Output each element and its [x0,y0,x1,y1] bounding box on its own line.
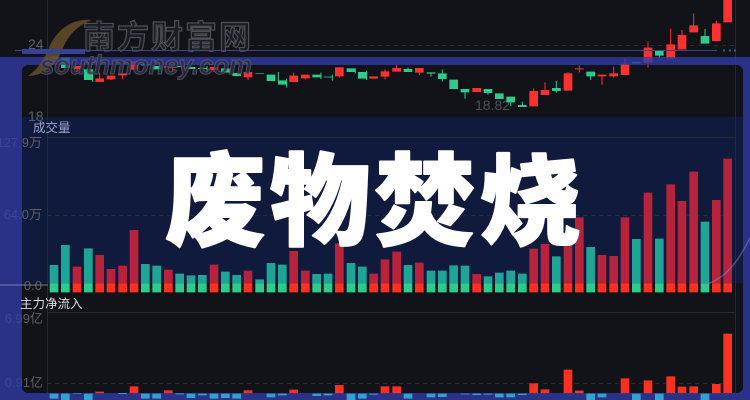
watermark crescent [28,20,92,76]
label: main net inflow: 主力净流入 [20,297,83,311]
title: 废物焚烧 [165,121,585,266]
candlestick chart [50,0,732,107]
axis labels: price [28,36,510,124]
blue tinted volume panel [22,117,743,283]
label: volume: 成交量 [33,120,71,135]
axis labels: volume and inflow [0,135,43,390]
main inflow chart: positive bars [95,334,732,393]
axis labels: price: 18 [28,108,44,124]
left highlight at zero line [0,284,48,286]
axis labels: volume and inflow: 64.0万 [4,207,42,222]
watermark: southern fortune logo [28,12,253,80]
axis labels: volume and inflow: 0.0 [24,278,42,293]
watermark url: southmoney.com [40,50,252,80]
main inflow chart: negative bars [50,393,709,400]
volume bar chart [50,159,732,292]
blue reference line [15,50,717,52]
blue line thick segment [22,49,85,54]
axis labels: volume and inflow: 6.99亿 [5,311,43,326]
axis labels: price: 18.82 [475,97,510,113]
axis labels: price: 24 [28,36,44,52]
watermark chinese name: 南方财富网 [83,12,253,58]
line end dots [723,50,736,52]
axis labels: volume and inflow: 0.91亿 [5,375,43,390]
decorative arc [702,238,750,286]
